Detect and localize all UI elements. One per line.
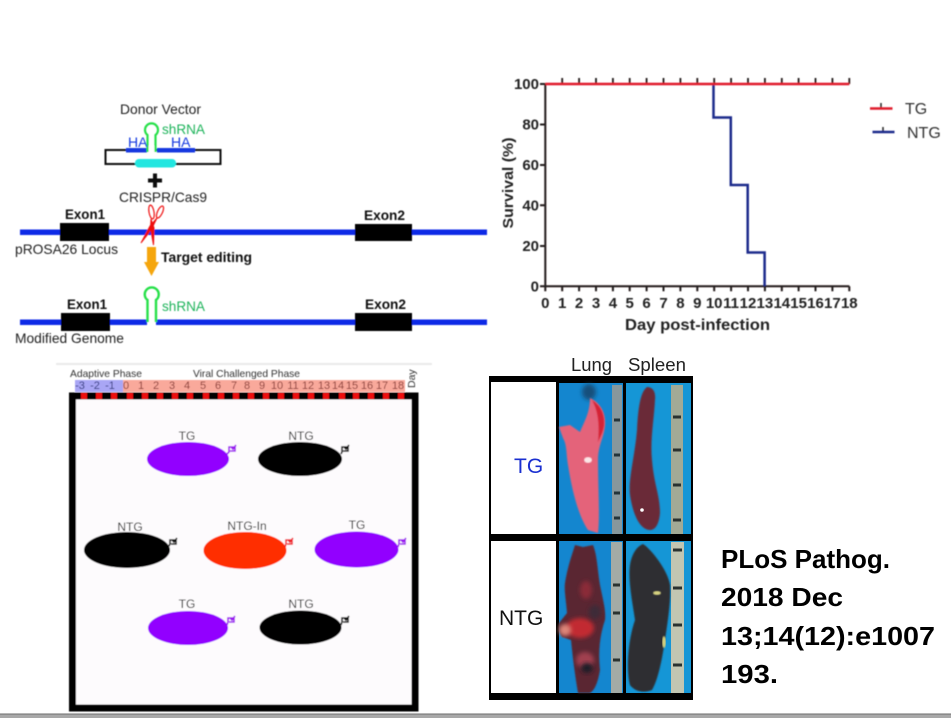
x axis tick labels: 18 — [841, 295, 858, 312]
panel: organ photographs — [489, 355, 693, 700]
timeline day numbers: 0 — [123, 380, 129, 392]
y axis tick labels: 100 — [514, 76, 539, 93]
label: Day: Day — [406, 369, 418, 388]
TG survival censor ticks — [562, 78, 849, 84]
x axis tick labels: 9 — [693, 295, 701, 312]
photo: TG spleen — [626, 383, 691, 534]
mouse: TG middle right: TG — [349, 518, 365, 532]
timeline day numbers: 12 — [302, 380, 314, 392]
x axis tick labels — [541, 295, 858, 312]
mouse: TG middle right — [314, 518, 406, 568]
timeline day numbers: 16 — [361, 380, 373, 392]
timeline day numbers: 17 — [376, 380, 388, 392]
photo: NTG spleen — [626, 541, 691, 693]
timeline day numbers: 10 — [271, 380, 283, 392]
timeline day numbers: 14 — [332, 380, 344, 392]
plus sign — [148, 174, 162, 188]
NTG survival line — [714, 84, 765, 286]
x axis tick labels: 10 — [706, 295, 723, 312]
x axis tick labels: 3 — [592, 295, 600, 312]
timeline day numbers: 2 — [153, 380, 159, 392]
donor vector plasmid — [106, 123, 220, 168]
mouse: NTG middle left: NTG — [117, 520, 143, 534]
axes and ticks — [540, 84, 849, 291]
photo grid frame — [489, 376, 693, 700]
x axis tick labels: 0 — [541, 295, 549, 312]
timeline day numbers: 7 — [231, 380, 237, 392]
mouse: TG bottom: TG — [179, 597, 195, 611]
mouse: TG top: TG — [179, 429, 195, 443]
citation text: PLoS Pathog. — [721, 544, 890, 574]
y axis title: Survival (%) — [500, 138, 517, 228]
exon 2 box, lower — [355, 313, 412, 331]
legend: TG — [870, 101, 927, 118]
mouse: TG top — [147, 429, 236, 476]
x axis tick labels: 6 — [642, 295, 651, 312]
photo: TG lung — [559, 383, 623, 534]
x axis tick labels: 12 — [740, 295, 756, 312]
y axis tick labels: 60 — [522, 157, 539, 174]
label: Exon2 lower: Exon2 — [365, 297, 406, 312]
x axis tick labels: 13 — [757, 295, 773, 312]
mouse: NTG middle left — [84, 520, 177, 568]
citation text — [721, 544, 935, 689]
x axis tick labels: 15 — [790, 295, 807, 312]
mouse: NTG-In middle — [204, 519, 293, 569]
label: shRNA inserted: shRNA — [162, 298, 206, 314]
modified genome line — [20, 320, 487, 325]
heading: Viral Challenged Phase: Viral Challenged Phase — [193, 368, 300, 380]
x axis tick labels: 7 — [659, 295, 668, 312]
timeline day numbers: -2 — [90, 380, 100, 392]
timeline day numbers: 4 — [184, 380, 190, 392]
label: Modified Genome: Modified Genome — [15, 330, 124, 346]
legend: NTG — [872, 125, 941, 142]
mouse: NTG bottom: NTG — [288, 597, 314, 611]
label: shRNA in vector: shRNA — [162, 121, 206, 137]
exon 1 box, upper — [60, 223, 109, 241]
mouse: TG bottom — [148, 597, 235, 645]
label: Exon2 upper: Exon2 — [364, 208, 405, 223]
arrow: target editing — [144, 247, 159, 276]
label: Target editing: Target editing — [161, 250, 252, 265]
timeline day numbers: 11 — [287, 380, 299, 392]
column label: Spleen: Spleen — [628, 355, 686, 375]
panel: gene targeting schematic — [15, 101, 487, 346]
legend: TG: TG — [905, 101, 927, 118]
timeline day numbers: -3 — [75, 380, 85, 392]
icon: scissors — [141, 205, 165, 245]
y axis tick labels: 40 — [522, 198, 539, 214]
citation text: 2018 Dec — [721, 582, 843, 612]
exon 2 box, upper — [355, 224, 412, 241]
row cell: TG — [491, 382, 556, 534]
photo: NTG lung — [559, 541, 623, 693]
x axis tick labels: 1 — [558, 295, 566, 312]
timeline day numbers — [75, 380, 404, 392]
timeline day numbers: 5 — [200, 380, 206, 392]
label: Exon1 lower: Exon1 — [67, 297, 107, 312]
label: left homology arm: HA — [128, 134, 148, 150]
x axis tick labels: 17 — [824, 295, 841, 312]
timeline strip: adaptive — [75, 380, 123, 392]
shRNA hairpin, inserted — [145, 287, 159, 322]
mouse: NTG top — [258, 429, 349, 476]
panel background — [56, 363, 432, 365]
row cell: NTG — [491, 541, 556, 693]
y axis tick labels: 0 — [531, 278, 539, 296]
timeline red ticks — [81, 393, 404, 399]
timeline strip: challenged — [123, 380, 405, 392]
timeline day numbers: 1 — [138, 380, 144, 392]
timeline day numbers: 3 — [169, 380, 175, 392]
timeline day numbers: 15 — [346, 380, 358, 392]
timeline day numbers: 8 — [244, 380, 250, 392]
bottom grey bar — [0, 714, 951, 718]
x axis tick labels: 5 — [626, 295, 634, 312]
citation text: 193. — [721, 659, 778, 689]
x axis tick labels: 16 — [807, 295, 824, 312]
legend: NTG: NTG — [907, 125, 941, 142]
x axis tick labels: 4 — [609, 295, 618, 312]
row cell: TG: TG — [514, 455, 543, 478]
timeline day numbers: 6 — [215, 380, 221, 392]
chart: survival curve — [500, 76, 941, 334]
TG survival line — [545, 83, 849, 85]
exon 1 box, lower — [61, 313, 110, 331]
citation text: 13;14(12):e1007 — [721, 621, 935, 651]
heading: Adaptive Phase: Adaptive Phase — [70, 368, 142, 380]
x axis tick labels: 8 — [676, 295, 685, 312]
panel: housing and challenge timeline — [56, 364, 432, 708]
label: pROSA26 Locus: pROSA26 Locus — [15, 241, 118, 257]
mouse: NTG bottom — [260, 597, 349, 644]
cage frame — [72, 396, 415, 708]
timeline day numbers: 13 — [318, 380, 330, 392]
mouse: NTG top: NTG — [288, 429, 314, 443]
heading: donor vector: Donor Vector — [120, 101, 201, 117]
y axis tick labels: 80 — [522, 116, 539, 134]
row cell: NTG: NTG — [499, 607, 543, 630]
locus line: pROSA26 — [20, 230, 487, 235]
y axis tick labels: 20 — [522, 238, 539, 255]
label: Exon1 upper: Exon1 — [65, 207, 105, 222]
x axis title: Day post-infection — [625, 317, 770, 334]
timeline day numbers: -1 — [105, 380, 115, 392]
timeline day numbers: 9 — [259, 380, 265, 392]
x axis tick labels: 11 — [723, 295, 739, 312]
mouse: NTG-In middle: NTG-In — [227, 519, 267, 533]
timeline day numbers: 18 — [392, 380, 404, 392]
x axis tick labels: 14 — [773, 295, 791, 312]
label: right homology arm: HA — [171, 134, 191, 150]
column label: Lung: Lung — [571, 355, 612, 375]
y axis tick labels — [514, 76, 539, 296]
label: CRISPR/Cas9: CRISPR/Cas9 — [119, 189, 207, 205]
x axis tick labels: 2 — [575, 295, 583, 312]
